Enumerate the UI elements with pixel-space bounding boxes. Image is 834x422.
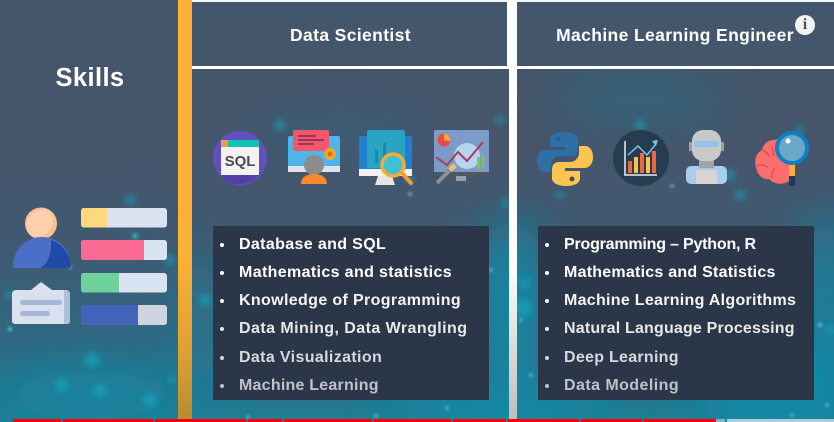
list item: Machine Learning [239, 377, 379, 394]
icon: info badge: i [803, 16, 807, 33]
icon: person body [13, 237, 71, 268]
header: Machine Learning Engineer: Machine Learning Engineer [556, 25, 794, 45]
skill bar 3 [81, 273, 167, 292]
heading: Skills: Skills [55, 64, 125, 92]
icon: id card [12, 282, 70, 324]
list item: Data Mining, Data Wrangling [239, 320, 467, 337]
gold vertical bar [178, 0, 192, 422]
list item: Mathematics and Statistics [564, 264, 776, 281]
list item: Mathematics and statistics [239, 264, 452, 281]
list item: Database and SQL [239, 236, 386, 253]
list item: Data Visualization [239, 349, 382, 366]
list item: Machine Learning Algorithms [564, 292, 796, 309]
list item: Deep Learning [564, 349, 679, 366]
icon: brain with magnifier [755, 131, 809, 186]
icon: person with skill bars [12, 208, 167, 325]
icon: SQL [213, 131, 267, 185]
panel: Machine Learning Engineer skills list [538, 226, 814, 400]
icon: robot [686, 130, 727, 184]
white vertical divider [507, 0, 517, 69]
icon: person head [25, 208, 57, 240]
icon: growth chart circle [613, 130, 669, 186]
skill bar 1 [81, 208, 167, 228]
white vertical divider lower [509, 69, 517, 422]
skill bar 4 [81, 305, 167, 325]
skill bar 2 [81, 240, 167, 260]
header: Machine Learning Engineer [517, 3, 833, 65]
white top line [192, 0, 834, 2]
icon: analytics with magnifier [359, 130, 414, 186]
list item: Data Modeling [564, 377, 679, 394]
video progress bar [13, 419, 834, 422]
icon: SQL: SQL [225, 153, 255, 170]
white horizontal divider [192, 66, 834, 69]
icon: trend chart monitor [434, 130, 489, 184]
list item: Knowledge of Programming [239, 292, 461, 309]
list item: Natural Language Processing [564, 320, 795, 337]
icon: python logo [537, 132, 593, 186]
icon: info badge [795, 15, 815, 35]
icon: programmer at monitor [287, 130, 341, 186]
panel: Data Scientist skills list [213, 226, 489, 400]
header: Data Scientist [192, 3, 507, 65]
header: Data Scientist: Data Scientist [290, 25, 411, 45]
list item: Programming – Python, R [564, 236, 756, 253]
